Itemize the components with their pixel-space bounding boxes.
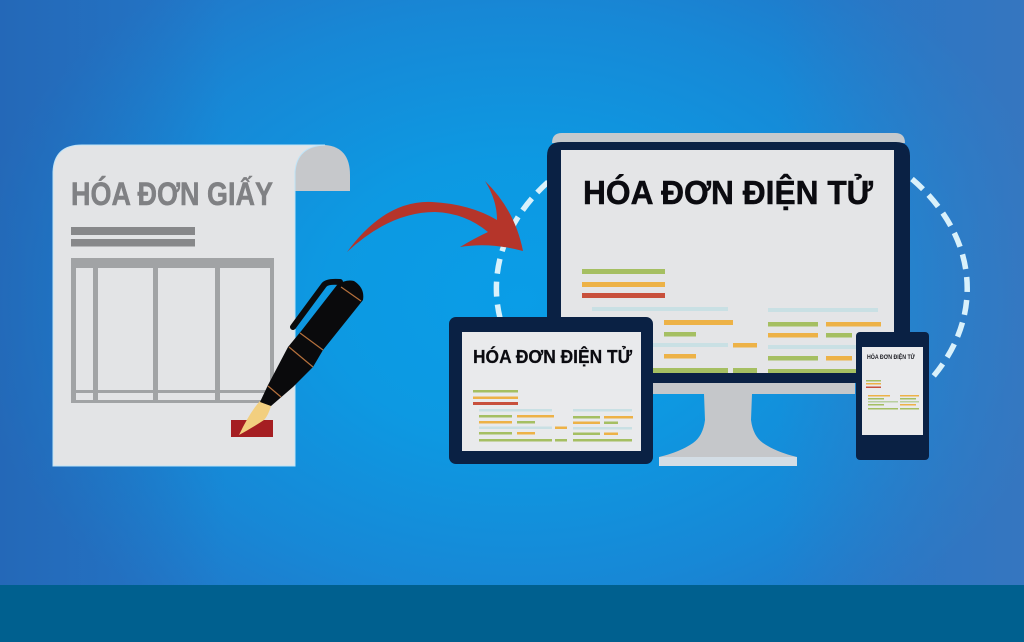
- phone content bars: [866, 380, 919, 410]
- monitor stand: [659, 394, 797, 466]
- monitor frame: [547, 142, 910, 383]
- tablet screen: [462, 332, 641, 451]
- pen body: [260, 280, 363, 406]
- monitor title: HÓA ĐƠN ĐIỆN TỬ: [583, 174, 874, 211]
- dashed circle: [496, 179, 967, 378]
- pen bands: [268, 287, 361, 397]
- phone: [856, 332, 929, 460]
- stand base: [659, 457, 797, 466]
- monitor chin: [653, 383, 855, 394]
- monitor: [547, 133, 910, 466]
- pen clip: [293, 282, 340, 327]
- invoice table: [71, 258, 274, 403]
- pen: [239, 280, 363, 435]
- phone title: HÓA ĐƠN ĐIỆN TỬ: [867, 353, 915, 361]
- phone screen: [862, 347, 923, 435]
- arrow: [347, 181, 523, 252]
- paper curl: [295, 145, 350, 191]
- tablet title: HÓA ĐƠN ĐIỆN TỬ: [473, 346, 633, 367]
- tablet: [449, 317, 653, 464]
- pen nib: [239, 401, 271, 435]
- paper heading: HÓA ĐƠN GIẤY: [71, 176, 273, 212]
- heading lines: [71, 227, 195, 246]
- monitor top strip: [552, 133, 905, 143]
- paper sheet: [53, 145, 325, 466]
- red signature box: [231, 420, 273, 437]
- tablet content bars: [473, 390, 633, 442]
- tablet frame: [449, 317, 653, 464]
- bottom band: [0, 585, 1024, 642]
- monitor screen: [561, 150, 894, 373]
- phone frame: [856, 332, 929, 460]
- monitor content bars: [582, 269, 881, 373]
- paper invoice: [53, 145, 350, 466]
